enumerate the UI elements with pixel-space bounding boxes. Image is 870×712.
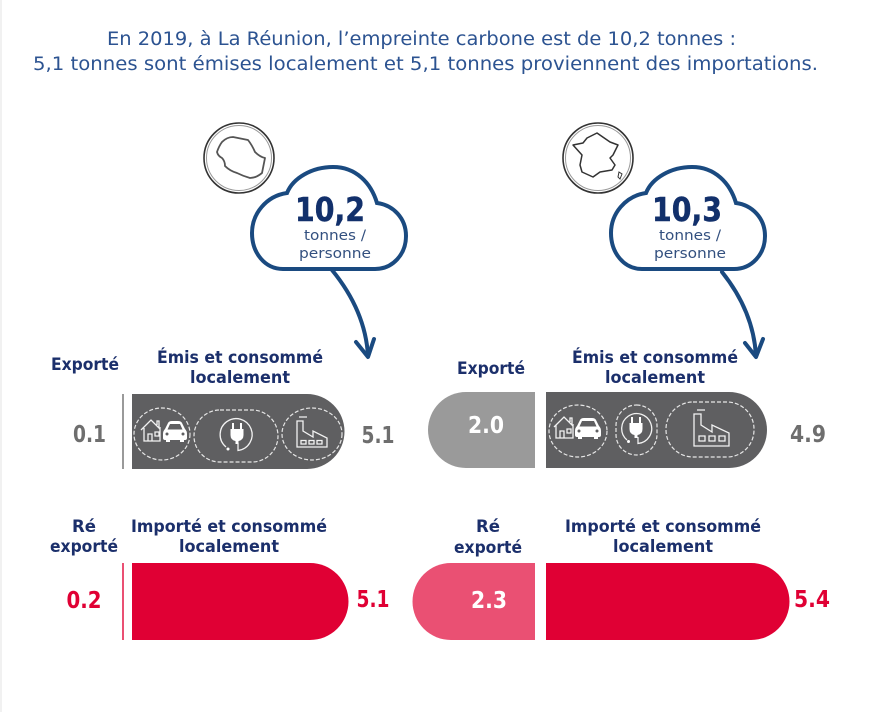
heading: Ré exporté right: exporté — [454, 538, 522, 558]
title — [33, 29, 818, 75]
value: local emissions 4.9: 4.9 — [790, 422, 826, 448]
cloud: La Réunion 10,2 tonnes per person: personne — [299, 246, 371, 262]
bar: imported right — [546, 563, 789, 640]
heading: Émis et consommé localement left: Émis et consommé — [157, 346, 323, 368]
heading: Émis et consommé localement right — [572, 346, 738, 388]
icon: house and car left — [134, 408, 190, 460]
bar: re-exported sliver left — [122, 563, 124, 640]
icon: La Réunion map badge — [204, 123, 274, 193]
heading: Importé et consommé localement right — [565, 517, 761, 557]
title: 5,1 tonnes sont émises localement et 5,1 tonnes proviennent des importations. — [33, 54, 818, 75]
heading: Émis et consommé localement left: localement — [190, 368, 290, 388]
value: exported 2.0: 2.0 — [468, 413, 504, 439]
heading: Importé et consommé localement left: Importé et consommé — [131, 517, 327, 537]
heading: Émis et consommé localement right: Émis et consommé — [572, 346, 738, 368]
icon: house and car right — [549, 405, 607, 457]
heading: Importé et consommé localement right: localement — [613, 537, 713, 557]
heading: Ré exporté left: exporté — [50, 537, 118, 557]
icon: plug right — [616, 405, 657, 455]
arrow: La Réunion cloud to local bar — [332, 270, 374, 357]
title: En 2019, à La Réunion, l’empreinte carbone est de 10,2 tonnes : — [107, 29, 736, 50]
bar: local emissions left — [132, 394, 344, 469]
heading: Ré exporté left — [50, 517, 118, 557]
heading: Importé et consommé localement left — [131, 517, 327, 557]
icon: plug left — [194, 410, 278, 462]
cloud: France 10,3 tonnes per person: personne — [654, 246, 726, 262]
heading: Ré exporté right: Ré — [476, 517, 500, 537]
cloud: La Réunion 10,2 tonnes per person: tonnes / — [304, 228, 366, 244]
value: re-exported 2.3: 2.3 — [471, 588, 507, 614]
value: local emissions 5.1: 5.1 — [362, 423, 394, 449]
icon: factory left — [282, 408, 342, 460]
heading: Ré exporté right — [454, 517, 522, 558]
heading: Émis et consommé localement left — [157, 346, 323, 388]
value: imported 5.4: 5.4 — [794, 587, 830, 613]
bar: exported 2.0 right — [428, 392, 535, 468]
cloud: France 10,3 tonnes per person: tonnes / — [659, 228, 721, 244]
cloud: France 10,3 tonnes per person — [611, 167, 765, 269]
heading: Ré exporté left: Ré — [72, 517, 96, 537]
heading: Exporté right: Exporté — [457, 359, 525, 379]
heading: Exporté left: Exporté — [51, 355, 119, 375]
arrow: France cloud to local bar — [722, 272, 763, 357]
icon: France map badge — [563, 123, 633, 193]
heading: Importé et consommé localement right: Importé et consommé — [565, 517, 761, 537]
heading: Émis et consommé localement right: localement — [605, 368, 705, 388]
value: imported 5.1: 5.1 — [356, 587, 390, 613]
bar: exported sliver left — [122, 394, 124, 469]
cloud: France 10,3 tonnes per person: 10,3 — [652, 190, 722, 229]
heading: Importé et consommé localement left: localement — [179, 537, 279, 557]
cloud: La Réunion 10,2 tonnes per person — [252, 167, 406, 269]
icon: factory right — [666, 402, 754, 457]
cloud: La Réunion 10,2 tonnes per person: 10,2 — [295, 190, 365, 229]
value: exported 0.1: 0.1 — [73, 422, 106, 448]
bar: re-exported 2.3 right — [412, 563, 535, 640]
bar: local emissions right — [546, 392, 767, 468]
bar: imported left — [132, 563, 348, 640]
value: re-exported 0.2: 0.2 — [66, 588, 102, 614]
